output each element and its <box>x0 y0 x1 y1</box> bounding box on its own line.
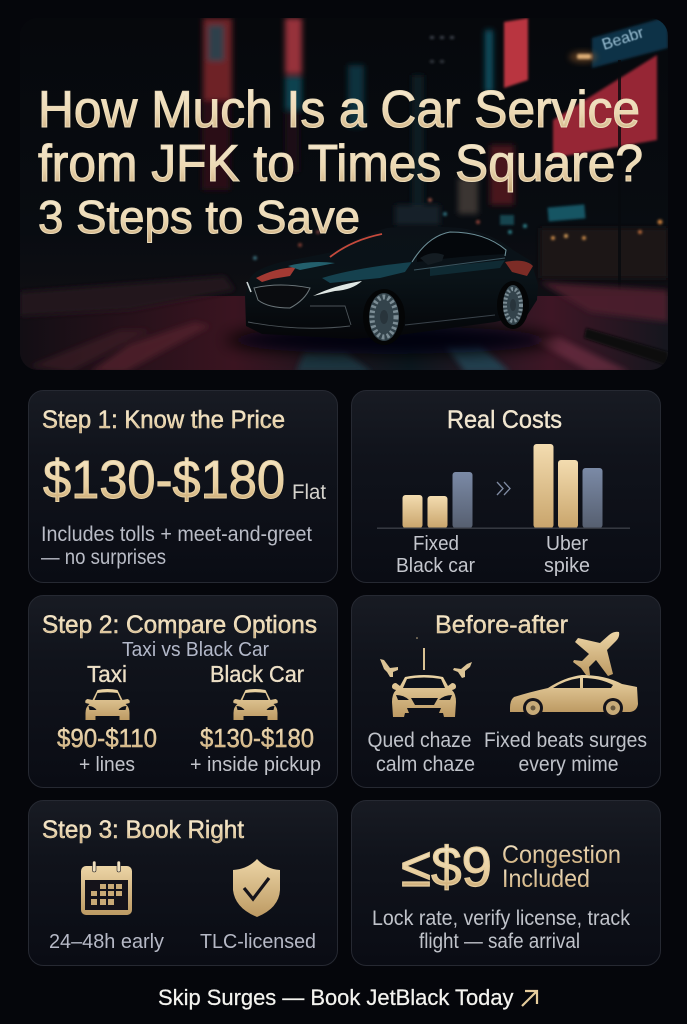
label: fixed black car <box>396 532 475 577</box>
heading: real costs: Real Costs <box>447 406 562 434</box>
congestion label <box>502 841 621 893</box>
caption: before <box>368 729 475 776</box>
black sedan <box>245 226 538 345</box>
bokeh lights behind the car <box>253 36 662 260</box>
checklist text: Lock rate, verify license, track <box>372 907 630 930</box>
column: taxi <box>57 661 157 776</box>
panel: step 2 compare options <box>28 596 338 788</box>
label: fixed black car: Black car <box>396 554 475 577</box>
panel: real costs <box>352 390 660 582</box>
title: 3 Steps to Save <box>38 191 360 243</box>
icon: shield with check <box>233 859 280 917</box>
bar chart <box>377 444 630 529</box>
icon: black car <box>233 689 278 720</box>
call to action: Skip Surges — Book JetBlack Today <box>158 985 514 1010</box>
city signs and buildings: Beabr <box>600 24 646 54</box>
caption: licensing: TLC-licensed <box>200 930 316 953</box>
title: How Much Is a Car Service <box>38 81 640 139</box>
flat label: Flat <box>292 481 326 504</box>
panel: congestion fee and checklist <box>352 800 660 966</box>
column: black car: Black Car <box>210 661 304 687</box>
heading: before-after: Before-after <box>435 611 568 639</box>
hero panel: night street with black car <box>20 18 668 372</box>
caption: timing: 24–48h early <box>49 930 165 953</box>
label: uber spike: Uber <box>546 532 588 555</box>
panel: before-after <box>352 596 660 788</box>
caption: before: Qued chaze <box>368 729 472 752</box>
checklist text <box>372 907 630 953</box>
panel: step 1 know the price <box>28 390 338 582</box>
congestion amount: ≤$9 <box>401 835 492 898</box>
column: taxi: Taxi <box>87 661 127 687</box>
label: uber spike <box>544 532 590 577</box>
caption: after <box>484 729 647 776</box>
caption: before: calm chaze <box>376 753 475 776</box>
icon: side-view car with large plane <box>510 632 638 718</box>
congestion label: Included <box>502 865 590 893</box>
taxi price: $90-$110 <box>57 723 157 753</box>
description: — no surprises <box>41 545 166 569</box>
heading: step 3: Step 3: Book Right <box>42 816 244 844</box>
title: from JFK to Times Square? <box>38 135 643 193</box>
label: fixed black car: Fixed <box>413 532 459 555</box>
icon: arrow <box>522 991 537 1006</box>
title <box>38 81 643 243</box>
label: uber spike: spike <box>544 554 590 577</box>
panel: step 3 book right <box>28 800 338 966</box>
caption: after: every mime <box>518 753 618 776</box>
city signs and buildings <box>202 18 668 290</box>
checklist text: flight — safe arrival <box>419 930 580 953</box>
description: Includes tolls + meet-and-greet <box>41 522 312 546</box>
icon: front-view car with planes <box>380 637 472 717</box>
taxi note: + lines <box>79 753 135 776</box>
icon: calendar <box>81 861 132 915</box>
black car price: $130-$180 <box>200 723 314 753</box>
congestion label: Congestion <box>502 841 621 869</box>
icon: taxi car <box>85 689 130 720</box>
road with red reflections <box>20 276 668 372</box>
heading: step 1: Step 1: Know the Price <box>42 406 285 434</box>
caption: after: Fixed beats surges <box>484 729 647 752</box>
black car note: + inside pickup <box>190 753 321 776</box>
description <box>41 522 312 569</box>
price range: $130-$180 <box>43 450 285 510</box>
subheading: Taxi vs Black Car <box>122 638 269 661</box>
heading: step 2: Step 2: Compare Options <box>42 611 317 639</box>
column: black car <box>190 661 321 776</box>
